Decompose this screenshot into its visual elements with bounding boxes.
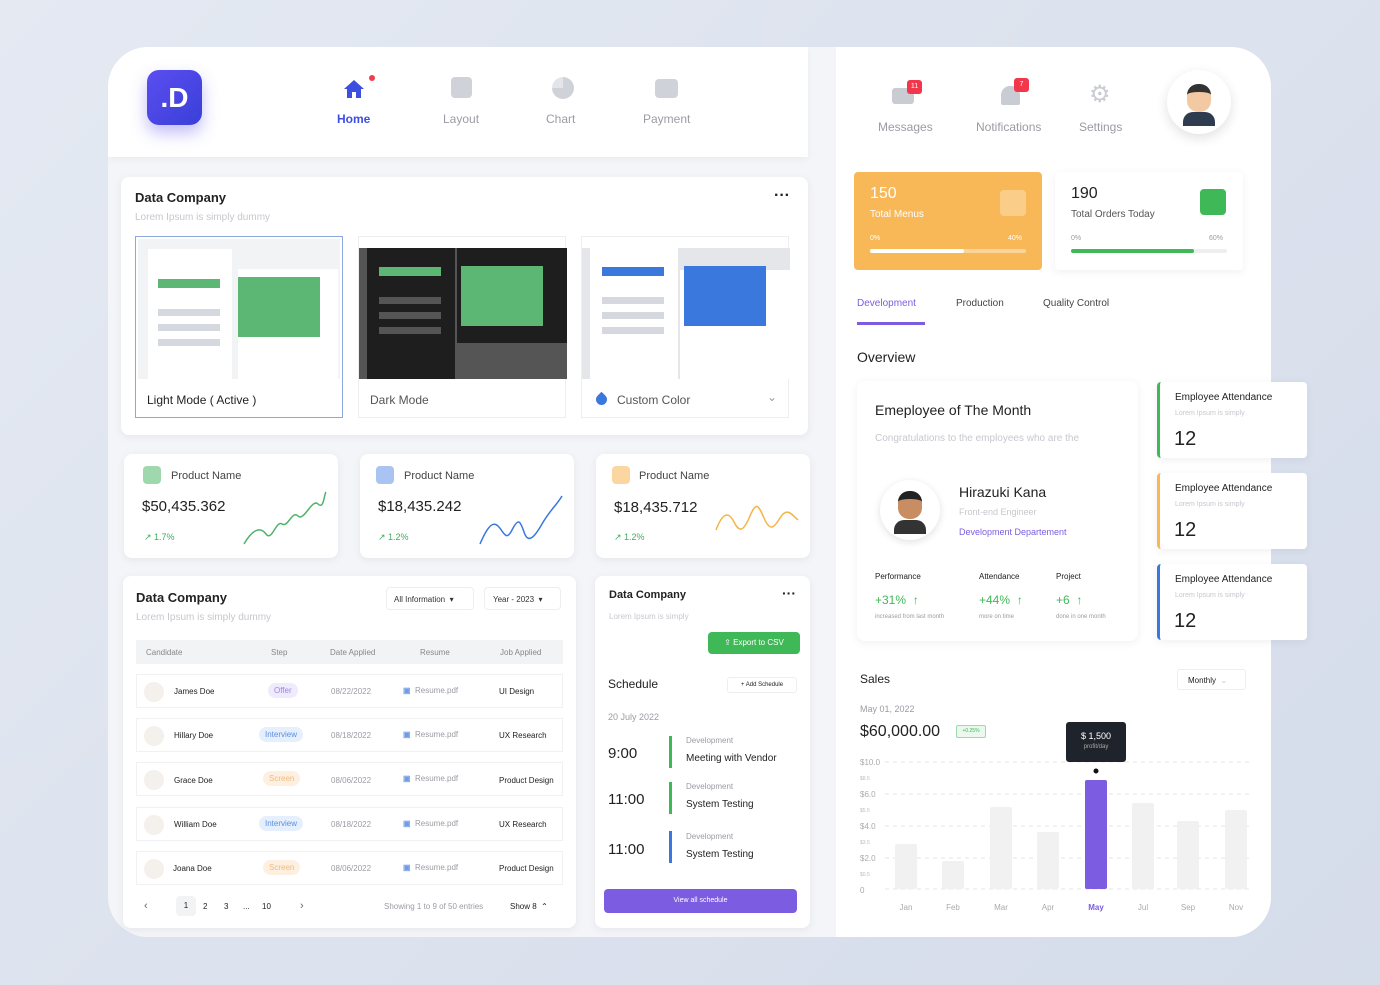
panel: schedule: 20 July 2022 [608, 712, 659, 722]
product card 1: Product Name [171, 470, 241, 482]
row: Grace [136, 762, 563, 796]
row: William: 08/18/2022 [331, 820, 371, 829]
nav: home: Home [337, 112, 370, 126]
panel: schedule: View all schedule [674, 897, 727, 904]
tooltip: profit/day [1084, 744, 1108, 750]
right panel background [836, 47, 1271, 937]
panel: sales chart: +0.25% [962, 728, 980, 734]
panel: schedule: 9:00 [608, 745, 637, 762]
attendance card 3: 12 [1174, 610, 1196, 632]
product card 1: $50,435.362 [142, 498, 225, 515]
tooltip [1066, 722, 1126, 762]
panel: sales chart: $3.5 [860, 840, 870, 846]
table header: Date Applied [330, 648, 375, 657]
panel: employee of the month: Emeployee of The Month [875, 402, 1031, 418]
row: Joana [136, 851, 563, 885]
row: Joana: 08/06/2022 [331, 864, 371, 873]
row: Hillary: Hillary Doe [174, 731, 213, 740]
row: James: James Doe [174, 687, 214, 696]
product card 3: $18,435.712 [614, 499, 697, 516]
panel: data company themes: Data Company [135, 190, 226, 205]
panel: employee of the month: Attendance [979, 572, 1019, 581]
panel: schedule: Data Company [609, 589, 686, 601]
main frame [108, 47, 1271, 937]
pagination: 1 [184, 901, 188, 910]
panel: sales chart: 0 [860, 886, 865, 895]
product card 2 [360, 454, 574, 558]
panel: sales chart: $4.0 [860, 822, 876, 831]
panel: employee of the month: done in one month [1056, 614, 1106, 620]
table header: Job Applied [500, 648, 541, 657]
row: Grace: Screen [269, 774, 294, 783]
panel: schedule: System Testing [686, 849, 754, 860]
panel: sales chart: Mar [994, 903, 1008, 912]
panel: sales chart: Jul [1138, 903, 1148, 912]
row: Joana: ▣ Resume.pdf [403, 863, 458, 872]
theme: custom [581, 236, 789, 418]
product card 1: ↗ 1.7% [144, 532, 175, 542]
panel: employee of the month: more on time [979, 614, 1014, 620]
attendance card 2: Employee Attendance [1175, 483, 1272, 494]
tabs: Development [857, 298, 916, 309]
icon: notifications: Notifications [976, 120, 1041, 134]
panel: data company themes [121, 177, 808, 435]
product card 2: ↗ 1.2% [378, 532, 409, 542]
nav: payment [643, 79, 690, 126]
panel: employee of the month: +31% ↑ [875, 593, 919, 607]
row: Hillary: ▣ Resume.pdf [403, 730, 458, 739]
product card 3: ↗ 1.2% [614, 532, 645, 542]
panel: sales chart: Monthly ⌄ [1188, 676, 1227, 685]
row: Joana: Joana Doe [173, 864, 212, 873]
panel: sales chart: May [1088, 903, 1104, 912]
row: James: 08/22/2022 [331, 687, 371, 696]
attendance card 1: Lorem Ipsum is simply [1175, 410, 1245, 417]
icon: settings: Settings [1079, 120, 1122, 134]
row: Grace: Product Design [499, 776, 554, 785]
logo [147, 70, 202, 125]
panel: employee of the month: increased from last month [875, 614, 944, 620]
icon: messages: Messages [878, 120, 933, 134]
pagination: ‹ [144, 900, 148, 912]
panel: sales chart: $60,000.00 [860, 723, 940, 740]
panel: employee of the month: Project [1056, 572, 1081, 581]
panel: schedule: ··· [782, 585, 796, 601]
panel: employee of the month: +6 ↑ [1056, 593, 1082, 607]
panel: data company themes: ··· [774, 187, 790, 204]
row: William [136, 807, 563, 841]
panel: schedule: 11:00 [608, 841, 644, 858]
table header: Candidate [146, 648, 182, 657]
panel: candidate table: Year - 2023 ▾ [493, 595, 543, 604]
product card 3: Product Name [639, 470, 709, 482]
avatar [1167, 70, 1231, 134]
stat: total menus: 150 [870, 185, 897, 202]
panel: schedule: System Testing [686, 799, 754, 810]
icon: settings: ⚙ [1089, 81, 1111, 108]
stat: total menus: 0% [870, 235, 880, 242]
panel: employee of the month: Front-end Engineer [959, 507, 1037, 517]
theme: custom: Custom Color [617, 393, 690, 407]
panel: employee of the month: Congratulations to the employees who are the [875, 433, 1079, 444]
panel: schedule: Lorem Ipsum is simply [609, 612, 689, 621]
panel: schedule: Development [686, 736, 733, 745]
pagination: Showing 1 to 9 of 50 entries [384, 902, 483, 911]
attendance card 1: Employee Attendance [1175, 392, 1272, 403]
panel: sales chart: $6.0 [860, 790, 876, 799]
row: William: ▣ Resume.pdf [403, 819, 458, 828]
nav: chart [546, 77, 576, 126]
nav: layout: Layout [443, 112, 479, 126]
panel: candidate table: Lorem Ipsum is simply dummy [136, 612, 271, 623]
panel: employee of the month: Performance [875, 572, 921, 581]
row: Grace: Grace Doe [174, 776, 213, 785]
theme: custom: ⌄ [767, 390, 777, 404]
stat: total menus: Total Menus [870, 209, 924, 220]
panel: schedule: Schedule [608, 677, 658, 691]
product card 3 [596, 454, 810, 558]
panel: employee of the month: Development Departement [959, 527, 1067, 537]
row: James: Offer [274, 686, 292, 695]
nav: chart: Chart [546, 112, 575, 126]
row: James [136, 674, 563, 708]
nav: layout [443, 77, 479, 126]
tabs: Production [956, 298, 1004, 309]
pagination: 10 [262, 902, 271, 911]
attendance card 3 [1157, 564, 1307, 640]
product card 2: Product Name [404, 470, 474, 482]
tabs: Quality Control [1043, 298, 1109, 309]
panel: sales chart: Sales [860, 672, 890, 686]
panel: schedule: Meeting with Vendor [686, 753, 777, 764]
pagination: 2 [203, 902, 207, 911]
table header: Step [271, 648, 287, 657]
panel: candidate table: Data Company [136, 590, 227, 605]
panel: sales chart: Nov [1229, 903, 1243, 912]
pagination [144, 896, 548, 916]
row: Joana: Product Design [499, 864, 554, 873]
stat: total orders: 190 [1071, 185, 1098, 202]
attendance card 2: Lorem Ipsum is simply [1175, 501, 1245, 508]
attendance card 3: Lorem Ipsum is simply [1175, 592, 1245, 599]
attendance card 2: 12 [1174, 519, 1196, 541]
panel: schedule [595, 576, 810, 928]
product card 2: $18,435.242 [378, 498, 461, 515]
attendance card 2 [1157, 473, 1307, 549]
panel: sales chart: Apr [1042, 903, 1055, 912]
panel: employee of the month: +44% ↑ [979, 593, 1023, 607]
panel: sales chart: $5.5 [860, 808, 870, 814]
row: Hillary [136, 718, 563, 752]
panel: schedule: ⇪ Export to CSV [724, 638, 784, 647]
panel: sales chart: Jan [900, 903, 912, 912]
heading: overview: Overview [857, 349, 915, 365]
panel: schedule: Development [686, 782, 733, 791]
panel: candidate table [123, 576, 576, 928]
panel: sales chart: May 01, 2022 [860, 704, 915, 714]
nav: home [337, 75, 375, 126]
stat: total orders: 60% [1209, 235, 1223, 242]
row: William: Interview [265, 819, 297, 828]
row: James: UI Design [499, 687, 534, 696]
panel: schedule: Development [686, 832, 733, 841]
pagination: ... [243, 902, 250, 911]
pagination: › [300, 900, 304, 912]
pagination: 3 [224, 902, 228, 911]
stat: total orders [1055, 172, 1243, 270]
row: Hillary: Interview [265, 730, 297, 739]
attendance card 1 [1157, 382, 1307, 458]
nav: payment: Payment [643, 112, 690, 126]
row: William: UX Research [499, 820, 547, 829]
attendance card 1: 12 [1174, 428, 1196, 450]
icon: notifications [976, 78, 1041, 134]
attendance card 3: Employee Attendance [1175, 574, 1272, 585]
row: Grace: ▣ Resume.pdf [403, 774, 458, 783]
theme: light: Light Mode ( Active ) [147, 393, 256, 407]
theme: dark: Dark Mode [370, 393, 429, 407]
product card 1 [124, 454, 338, 558]
panel: sales chart: $2.0 [860, 854, 876, 863]
panel: sales chart: $0.5 [860, 872, 870, 878]
pagination: Show 8 ⌃ [510, 902, 548, 911]
panel: sales chart [860, 669, 1249, 912]
tooltip: $ 1,500 [1081, 731, 1111, 741]
panel: sales chart: $8.5 [860, 776, 870, 782]
row: Joana: Screen [269, 863, 294, 872]
stat: total menus: 40% [1008, 235, 1022, 242]
row: William: William Doe [174, 820, 217, 829]
icon: messages [878, 80, 933, 134]
stat: total orders: Total Orders Today [1071, 209, 1155, 220]
icon: settings [1079, 81, 1122, 134]
panel: data company themes: Lorem Ipsum is simply dummy [135, 212, 270, 223]
panel: sales chart: $10.0 [860, 758, 881, 767]
row: James: ▣ Resume.pdf [403, 686, 458, 695]
icon: notifications: 7 [1020, 81, 1023, 88]
stat: total orders: 0% [1071, 235, 1081, 242]
stat: total menus [854, 172, 1042, 270]
logo: .D [160, 82, 188, 113]
theme: light [135, 236, 343, 418]
top nav bar [108, 47, 808, 157]
panel: employee of the month: Hirazuki Kana [959, 484, 1046, 500]
row: Hillary: UX Research [499, 731, 547, 740]
panel: schedule: + Add Schedule [741, 682, 783, 688]
row: Hillary: 08/18/2022 [331, 731, 371, 740]
panel: employee of the month [857, 381, 1138, 641]
panel: sales chart: Sep [1181, 903, 1196, 912]
icon: messages: 11 [911, 83, 918, 90]
panel: schedule: 11:00 [608, 791, 644, 808]
panel: sales chart: Feb [946, 903, 960, 912]
table header: Resume [420, 648, 450, 657]
theme: dark [358, 236, 566, 418]
panel: candidate table: All Information ▾ [394, 595, 454, 604]
table header [136, 640, 563, 664]
row: Grace: 08/06/2022 [331, 776, 371, 785]
tabs [857, 298, 1109, 325]
